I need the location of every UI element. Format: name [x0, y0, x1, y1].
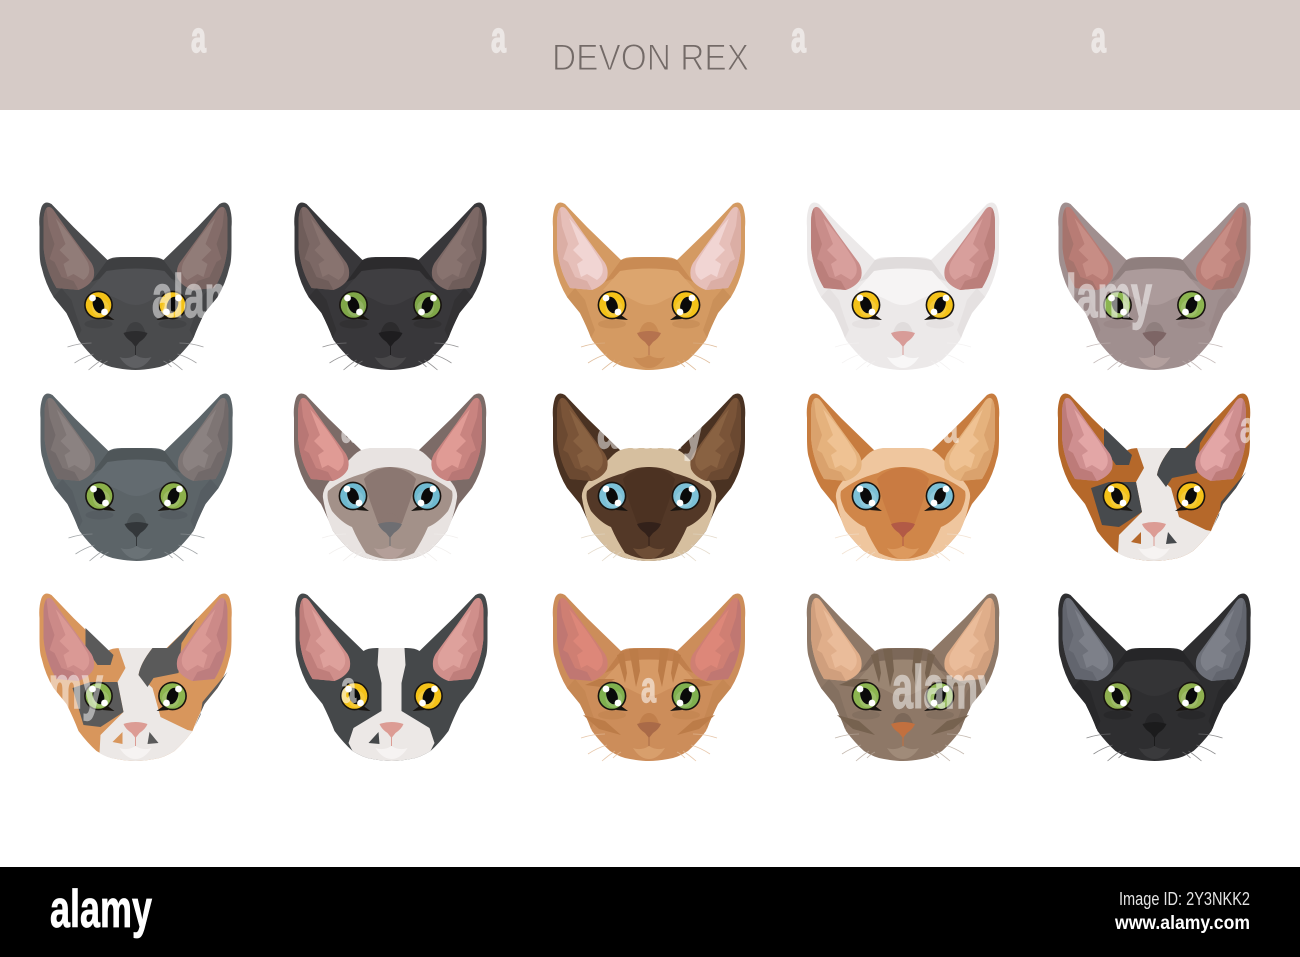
nose and mouth — [374, 322, 406, 368]
nose and mouth — [376, 713, 408, 759]
muzzle spot — [368, 732, 380, 744]
cat 5: lilac, green eyes — [1058, 203, 1251, 370]
website: www.alamy.com — [1114, 913, 1250, 934]
watermarks: a — [791, 13, 806, 62]
watermarks: a — [1240, 403, 1255, 452]
eyes — [852, 482, 954, 511]
eyes — [84, 682, 187, 711]
watermarks: a — [191, 13, 206, 62]
nose and mouth — [633, 513, 665, 559]
cat 14: brown tabby, green eyes — [807, 594, 999, 761]
eyes — [1103, 291, 1206, 320]
cat 13: ginger tabby, green eyes — [553, 594, 745, 761]
watermarks: a — [641, 663, 656, 712]
eyes — [339, 291, 442, 320]
cat 3: ginger, pink ears, yellow eyes — [553, 203, 745, 370]
watermarks: alamy — [1045, 263, 1152, 330]
cat 8: seal point, blue eyes — [553, 394, 745, 561]
eyes — [1103, 482, 1205, 511]
cat 11: light calico, green eyes — [39, 594, 232, 761]
nose and mouth — [1138, 322, 1170, 368]
cat 1: black, yellow eyes — [39, 203, 232, 370]
watermarks: a — [491, 13, 506, 62]
eyes — [340, 682, 443, 711]
nose and mouth — [120, 322, 152, 368]
eyes — [84, 291, 187, 320]
cat 4: white, yellow eyes — [807, 203, 999, 370]
nose and mouth — [887, 513, 919, 559]
footer bar — [0, 867, 1300, 957]
eyes — [598, 482, 700, 511]
nose and mouth — [120, 713, 152, 759]
eyes — [598, 682, 700, 711]
nose and mouth — [887, 322, 919, 368]
title: DEVON REX — [552, 37, 749, 78]
cat 10: dark calico, yellow eyes — [1058, 394, 1250, 561]
eyes — [1103, 682, 1206, 711]
watermarks: alamy — [892, 654, 999, 721]
cat 2: brown-black, green eyes — [294, 203, 487, 370]
alamy logo: alamy — [50, 880, 152, 939]
nose and mouth — [633, 322, 665, 368]
cat 6: blue-grey, green eyes — [40, 394, 233, 561]
nose and mouth — [1138, 713, 1170, 759]
eyes — [598, 291, 700, 320]
watermarks: a — [1091, 13, 1106, 62]
nose and mouth — [374, 513, 406, 559]
watermarks: a — [341, 663, 356, 712]
cat 7: lilac point, blue eyes — [294, 394, 486, 561]
watermarks: a — [341, 403, 356, 452]
nose and mouth — [120, 513, 152, 559]
nose and mouth — [887, 713, 919, 759]
eyes — [85, 482, 188, 511]
cat 15: black, blue-grey ears, green eyes — [1058, 594, 1251, 761]
watermarks: alamy — [0, 654, 103, 721]
image id: Image ID: 2Y3NKK2 — [1119, 889, 1250, 909]
watermarks: alamy — [597, 394, 704, 461]
watermarks — [0, 13, 1255, 721]
cat 12: black and white, yellow eyes — [295, 594, 488, 761]
header band — [0, 0, 1300, 110]
cat 9: flame point, blue eyes — [807, 394, 999, 561]
nose and mouth — [633, 713, 665, 759]
eyes — [852, 291, 954, 320]
nose and mouth — [1138, 513, 1170, 559]
watermarks: a — [943, 403, 958, 452]
eyes — [852, 682, 954, 711]
watermarks: alamy — [152, 263, 259, 330]
eyes — [339, 482, 441, 511]
